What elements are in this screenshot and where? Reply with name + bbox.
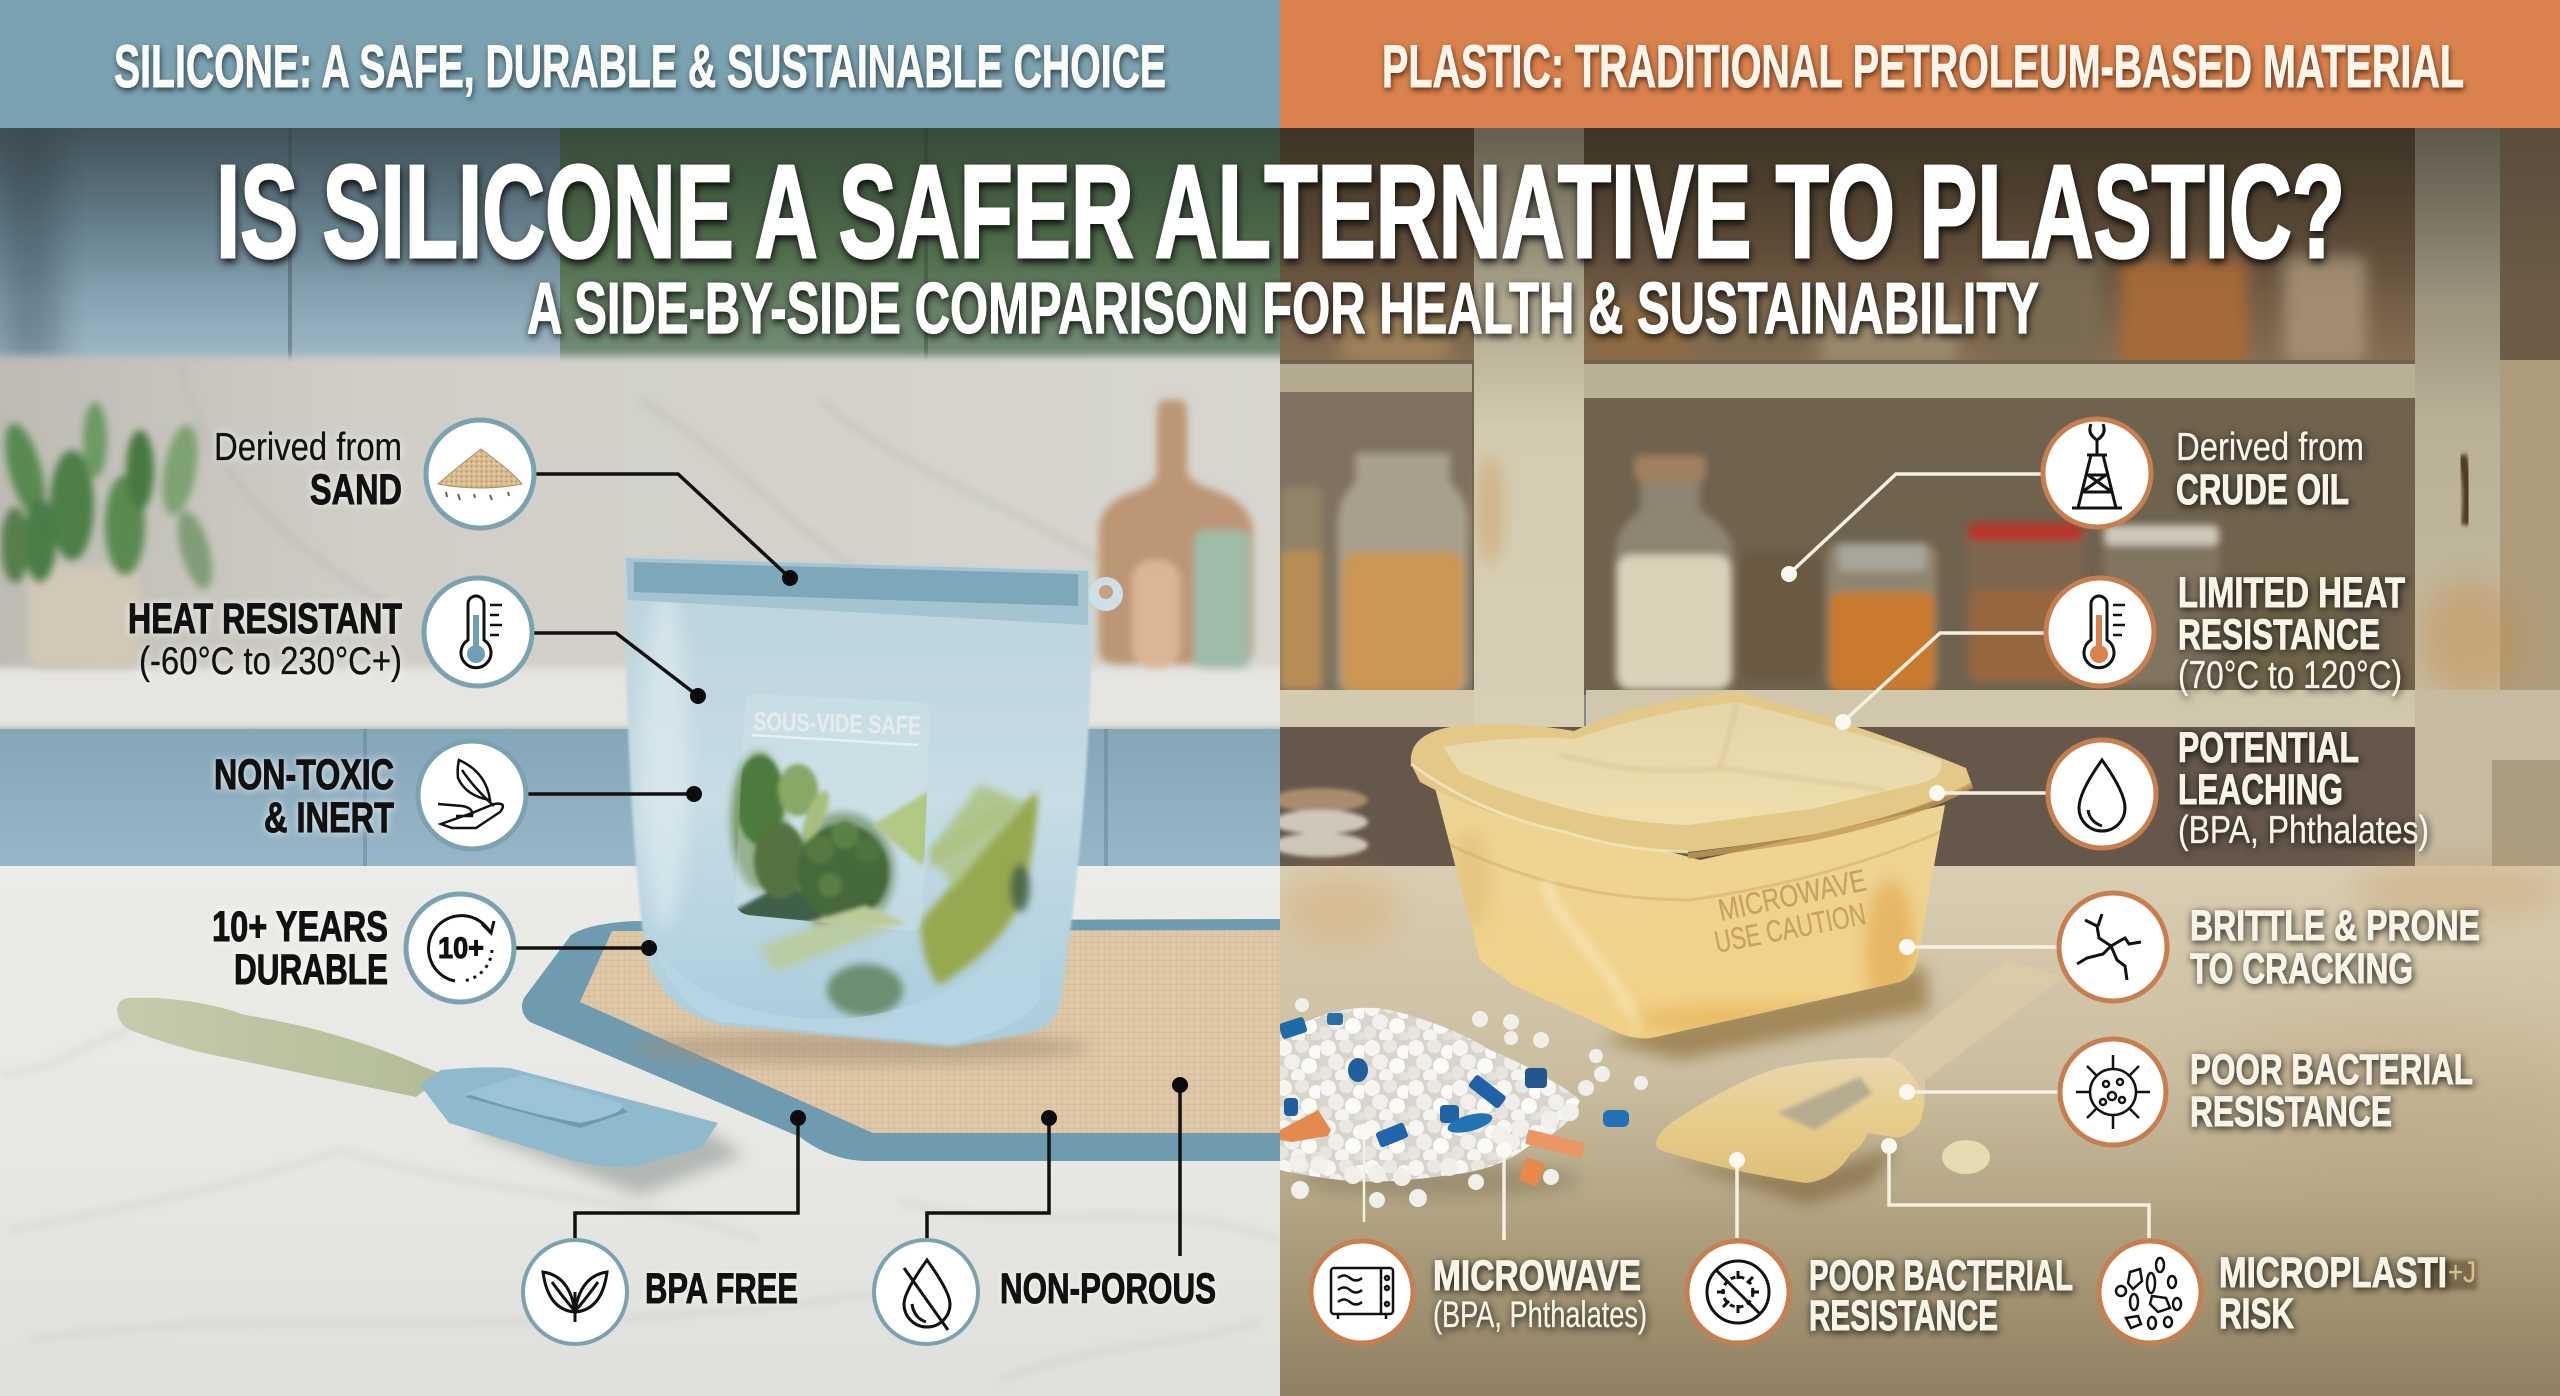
callout: microplastic risk	[2099, 1241, 2477, 1343]
callout: derived from sand: Derived from	[214, 426, 402, 469]
callout: heat resistant	[128, 578, 532, 686]
callout: non-porous	[874, 1240, 1216, 1344]
callout: microwave	[1311, 1241, 1647, 1343]
reusable silicone pouch	[624, 557, 1123, 1064]
callout: poor bacterial resistance side	[2060, 1039, 2473, 1145]
callout: brittle and prone to cracking	[2059, 893, 2480, 1001]
sous-vide window	[735, 694, 930, 931]
plastic pellets pile	[1278, 998, 1648, 1208]
plastic callouts	[1311, 419, 2480, 1343]
top dark overlay behind title	[0, 128, 2560, 298]
microwave caution label	[1712, 862, 1869, 960]
callout: derived from crude oil: CRUDE OIL	[2176, 466, 2349, 514]
callout: microwave: (BPA, Phthalates)	[1433, 1294, 1647, 1335]
marble backsplash	[0, 356, 1300, 686]
callout: derived from sand: SAND	[310, 466, 402, 514]
jars on shelf	[1280, 450, 2224, 690]
pouch hang tab	[1089, 577, 1123, 611]
callout: non-toxic and inert: NON-TOXIC	[214, 751, 394, 799]
callout: 10+ years durable: 10+	[438, 932, 484, 965]
pouch seal strip	[626, 558, 1088, 625]
callout: brittle and prone to cracking: TO CRACKING	[2190, 945, 2413, 993]
marble countertop	[0, 866, 1280, 1396]
lower cupboard	[1272, 690, 2560, 870]
vegetables inside pouch	[731, 750, 1037, 1016]
microwave caution label: MICROWAVE	[1715, 862, 1869, 928]
pantry upper shelf	[1280, 128, 2560, 368]
callout: bpa free: BPA FREE	[645, 1265, 798, 1313]
pantry mid shelf wall	[1280, 360, 2415, 695]
upper cabinets	[0, 128, 1280, 368]
silicone spatula	[117, 998, 745, 1195]
counter surface	[1280, 860, 2560, 1396]
melted plastic spatula	[1656, 960, 2064, 1205]
callout: potential leaching: POTENTIAL	[2178, 724, 2359, 772]
shelves and posts	[1280, 128, 2560, 727]
callout: limited heat resistance: RESISTANCE	[2178, 611, 2380, 659]
callout: derived from sand	[214, 420, 534, 528]
microwave caution label: USE CAUTION	[1712, 896, 1869, 960]
back counter	[0, 668, 1300, 730]
deformed plastic container	[1411, 692, 1972, 1060]
callout: microwave: MICROWAVE	[1433, 1252, 1641, 1300]
callout: potential leaching: LEACHING	[2178, 766, 2343, 814]
header bar: silicone	[0, 0, 1280, 128]
callout: poor bacterial resistance bottom: RESISTANCE	[1809, 1292, 1998, 1340]
callout: microplastic risk: +J	[2448, 1256, 2476, 1289]
callout: 10+ years durable: DURABLE	[234, 946, 388, 994]
callout: heat resistant: HEAT RESISTANT	[128, 595, 402, 643]
panel: silicone scene background	[0, 128, 1300, 1396]
header bar: silicone: SILICONE: A SAFE, DURABLE & SUSTAINABLE CHOICE	[114, 33, 1166, 100]
container rim	[1411, 692, 1972, 856]
coloured plastic fragments	[1278, 1013, 1629, 1187]
clear food seen through window	[735, 755, 930, 930]
callout: limited heat resistance	[2046, 569, 2405, 697]
callout: 10+ years durable: 10+ YEARS	[212, 903, 388, 951]
cutting board and bottles	[1099, 400, 1253, 668]
header bar: plastic	[1280, 0, 2560, 128]
callout: heat resistant: (-60°C to 230°C+)	[139, 640, 402, 683]
plant	[0, 402, 219, 668]
callout: non-toxic and inert: & INERT	[264, 794, 394, 842]
callout: potential leaching	[2048, 724, 2429, 852]
plastic callout connectors	[1356, 474, 2149, 1240]
callout: poor bacterial resistance side: RESISTANCE	[2190, 1088, 2392, 1136]
callout: limited heat resistance: LIMITED HEAT	[2178, 569, 2405, 617]
callout: 10+ years durable	[212, 894, 514, 1002]
lower blue cabinets	[0, 729, 1280, 867]
sous-vide window: SOUS-VIDE SAFE	[753, 706, 922, 740]
frosted pouch lower panel	[688, 1001, 1038, 1044]
vegetables right of window	[922, 784, 1037, 984]
panel: plastic scene background	[1272, 128, 2560, 1396]
callout: microplastic risk: RISK	[2219, 1290, 2294, 1338]
silicone callouts	[128, 420, 1216, 1344]
callout: derived from crude oil: Derived from	[2176, 426, 2364, 469]
silicone callout connectors	[516, 474, 1188, 1256]
callout: non-porous: NON-POROUS	[1000, 1265, 1216, 1313]
silicone baking mat	[522, 919, 1280, 1161]
callout: potential leaching: (BPA, Phthalates)	[2178, 809, 2429, 852]
callout: derived from crude oil	[2043, 419, 2364, 527]
callout: bpa free	[523, 1240, 798, 1344]
callout: poor bacterial resistance bottom	[1687, 1241, 2073, 1343]
callout: poor bacterial resistance bottom: POOR BACTERIAL	[1809, 1252, 2073, 1300]
callout: non-toxic and inert	[214, 741, 526, 849]
callout: microplastic risk: MICROPLASTI	[2219, 1249, 2447, 1297]
callout: limited heat resistance: (70°C to 120°C)	[2178, 654, 2402, 697]
